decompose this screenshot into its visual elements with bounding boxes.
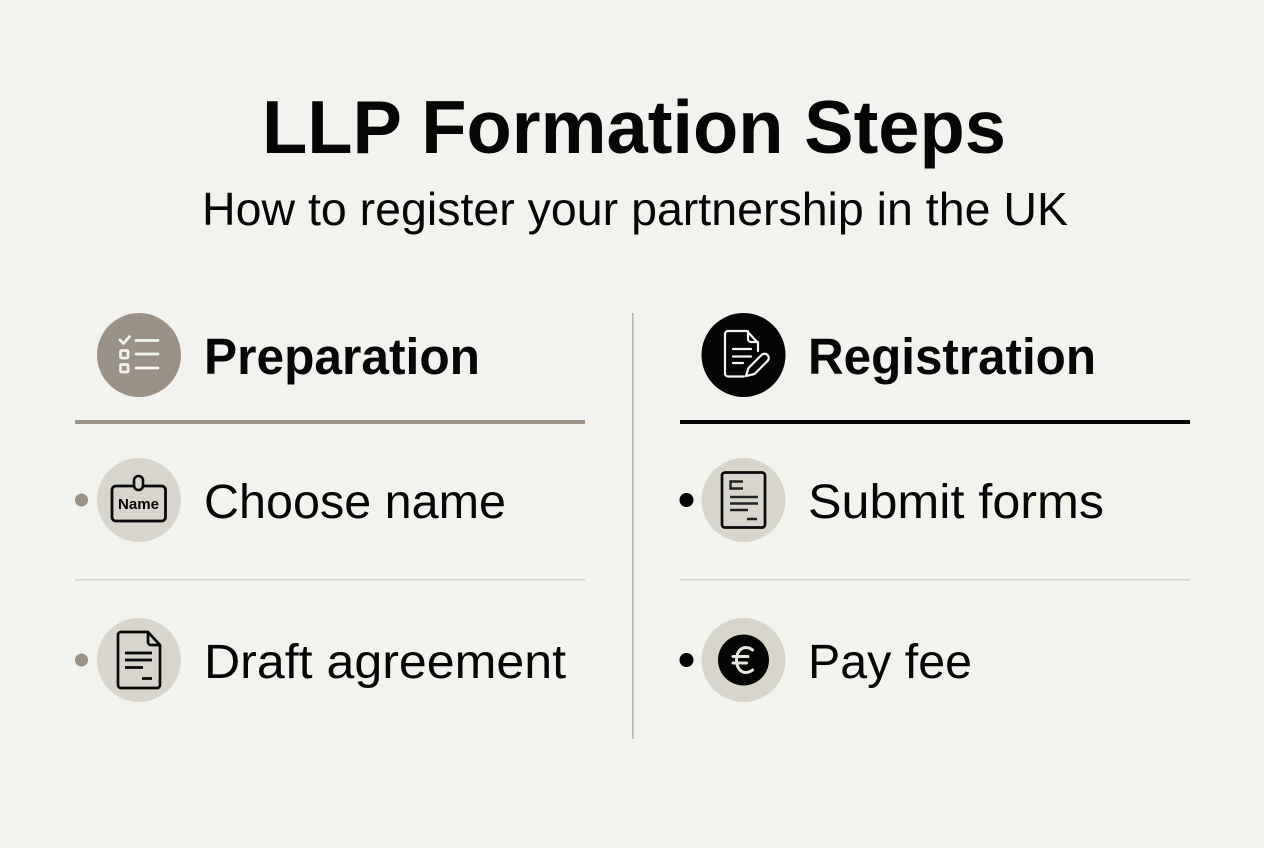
row divider — [75, 579, 585, 580]
icon: name badge: Name — [118, 497, 159, 513]
icon: document with pencil — [702, 313, 786, 397]
heading: registration: Registration — [808, 328, 1096, 385]
icon: document — [97, 618, 181, 702]
bullet — [680, 493, 694, 507]
panel: registration — [680, 313, 1190, 702]
heading rule — [75, 420, 585, 424]
icon: euro coin — [702, 618, 786, 702]
title: LLP Formation Steps — [262, 85, 1006, 169]
subtitle: How to register your partnership in the UK — [202, 183, 1068, 235]
icon: checklist — [97, 313, 181, 397]
heading rule — [680, 420, 1190, 424]
bullet — [75, 654, 88, 666]
label: Pay fee — [808, 636, 972, 689]
bullet — [680, 653, 694, 667]
label: Draft agreement — [204, 636, 566, 689]
row divider — [680, 579, 1190, 580]
bullet — [75, 494, 88, 506]
step: draft agreement — [75, 618, 566, 702]
label: Submit forms — [808, 476, 1104, 529]
step: pay fee — [680, 618, 972, 702]
step: choose name — [75, 458, 506, 542]
icon: name badge — [97, 458, 181, 542]
icon: form — [702, 458, 786, 542]
step: submit forms — [680, 458, 1104, 542]
central divider — [632, 313, 634, 739]
panel: preparation — [75, 313, 585, 702]
label: Choose name — [204, 476, 506, 529]
heading: preparation: Preparation — [204, 328, 480, 385]
